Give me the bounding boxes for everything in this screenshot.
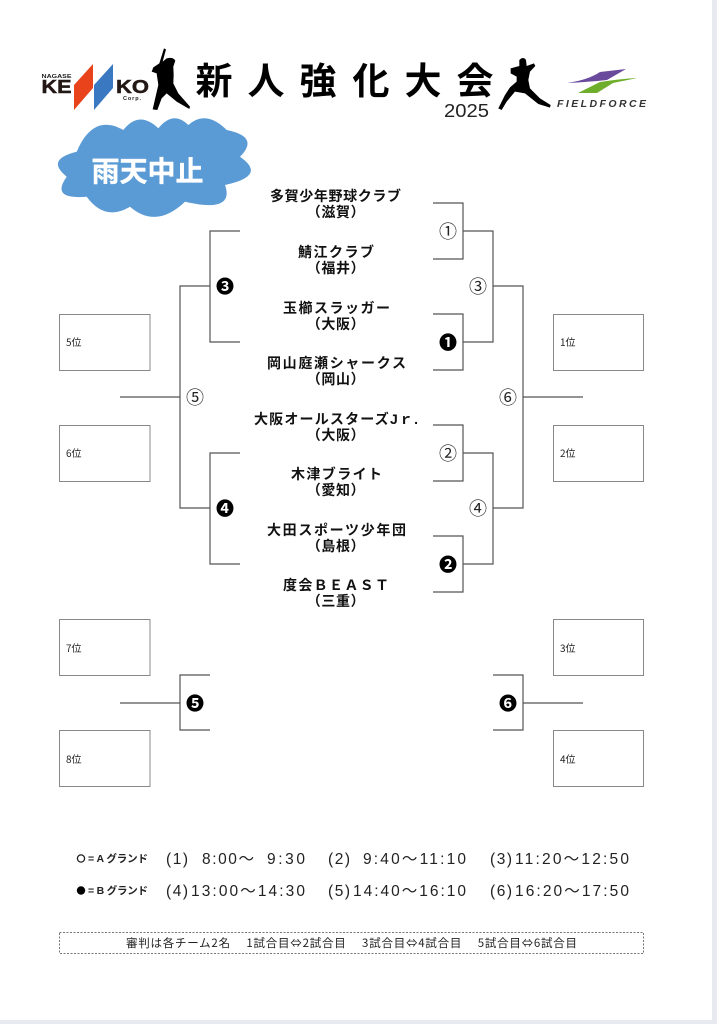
team list: （大阪） — [307, 316, 365, 332]
ranking labels: 6位 — [66, 445, 82, 460]
team list: （愛知） — [307, 482, 365, 498]
title: 化 — [352, 51, 390, 105]
schedule times: (4) — [166, 883, 188, 900]
title — [196, 51, 494, 121]
ranking labels: 2位 — [560, 445, 576, 460]
team list: （福井） — [307, 260, 365, 276]
team list: 木津ブライト — [291, 466, 382, 482]
ranking labels: 1位 — [560, 334, 576, 349]
ranking labels: 5位 — [66, 334, 82, 349]
match numbers: ❶ — [439, 329, 457, 355]
ranking labels: 4位 — [560, 751, 576, 766]
cloud callout: rain cancellation — [58, 118, 251, 217]
schedule times: 9:30 — [267, 851, 305, 868]
match numbers: ① — [439, 218, 457, 244]
schedule times: 11:20～12:50 — [515, 851, 629, 868]
match numbers: ② — [439, 440, 457, 466]
ranking boxes — [60, 314, 644, 786]
match numbers: ❺ — [186, 690, 204, 716]
team list: 大阪オールスターズJｒ. — [254, 411, 418, 427]
ranking labels: 7位 — [66, 640, 82, 655]
schedule times: (1) — [166, 851, 188, 868]
title: 大 — [404, 51, 442, 105]
title: 2025 — [444, 101, 489, 121]
schedule times: (2) — [328, 851, 350, 868]
team list: （岡山） — [307, 371, 365, 387]
team list: （滋賀） — [307, 204, 365, 220]
icon: batter silhouette — [152, 48, 190, 110]
team list: 玉櫛スラッガー — [283, 300, 390, 316]
title: 会 — [456, 51, 494, 105]
schedule times: (6) — [490, 883, 512, 900]
schedule legend: = B グランド — [88, 884, 148, 897]
title: 新 — [196, 51, 232, 105]
umpire note — [60, 932, 644, 954]
ranking labels: 8位 — [66, 751, 82, 766]
match numbers — [186, 218, 517, 716]
logo: Fieldforce: FIELDFORCE — [557, 98, 647, 110]
schedule times: 14:40～16:10 — [353, 883, 466, 900]
icon: pitcher silhouette — [498, 58, 551, 110]
schedule times: 8:00～ — [202, 851, 254, 868]
team list: 多賀少年野球クラブ — [270, 188, 401, 204]
logo: Nagase Kenko: KO — [116, 76, 149, 97]
team list: （三重） — [307, 593, 365, 609]
team list: 鯖江クラブ — [298, 244, 374, 260]
schedule times: 16:20～17:50 — [515, 883, 629, 900]
logo: Nagase Kenko: NAGASE — [42, 74, 72, 80]
match numbers: ⑤ — [186, 384, 204, 410]
match numbers: ⑥ — [499, 384, 517, 410]
team list: （島根） — [307, 538, 365, 554]
ranking labels: 3位 — [560, 640, 576, 655]
match numbers: ❸ — [216, 273, 234, 299]
team list: （大阪） — [307, 427, 365, 443]
logo: Nagase Kenko: KE — [42, 76, 72, 97]
ranking labels — [66, 334, 576, 766]
team list — [254, 188, 418, 609]
schedule times: 9:40～11:10 — [363, 851, 466, 868]
schedule times — [166, 851, 629, 900]
team list: 大田スポーツ少年団 — [267, 522, 406, 538]
schedule times: (3) — [490, 851, 512, 868]
title: 人 — [248, 51, 284, 105]
match numbers: ❻ — [499, 690, 517, 716]
schedule legend: = A グランド — [88, 852, 148, 865]
logo: Fieldforce — [557, 69, 647, 110]
match numbers: ❷ — [439, 551, 457, 577]
team list: 度会ＢＥＡＳＴ — [283, 577, 389, 593]
logo: Nagase Kenko: Corp. — [123, 96, 141, 102]
schedule times: 13:00～14:30 — [191, 883, 305, 900]
schedule times: (5) — [328, 883, 350, 900]
title: 強 — [300, 51, 336, 105]
tournament bracket lines — [120, 203, 583, 730]
logo: Nagase Kenko — [42, 64, 149, 110]
cloud callout: rain cancellation: 雨天中止 — [91, 156, 204, 187]
umpire note: 審判は各チーム2名 1試合目⇔2試合目 3試合目⇔4試合目 5試合目⇔6試合目 — [126, 935, 577, 951]
match numbers: ❹ — [216, 495, 234, 521]
match numbers: ④ — [469, 495, 487, 521]
schedule legend — [77, 852, 148, 897]
team list: 岡山庭瀬シャークス — [267, 355, 406, 371]
match numbers: ③ — [469, 273, 487, 299]
